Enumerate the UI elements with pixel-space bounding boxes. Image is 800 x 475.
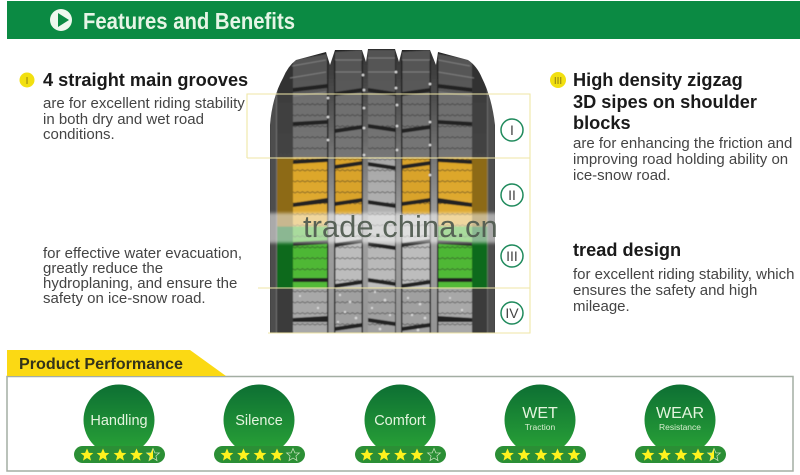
badge: silence bbox=[214, 384, 305, 463]
text block: water evacuation bbox=[43, 245, 242, 307]
badge: wet traction: WET bbox=[522, 405, 558, 422]
heading: zigzag sipes: blocks bbox=[573, 113, 631, 133]
text block: sipes benefit: ice-snow road. bbox=[573, 167, 671, 184]
heading: zigzag sipes bbox=[573, 70, 757, 133]
section tab: Product Performance bbox=[19, 356, 183, 373]
text block: grooves benefit: conditions. bbox=[43, 126, 115, 143]
text block: sipes benefit: are for enhancing the friction and bbox=[573, 135, 792, 152]
tire illustration bbox=[268, 48, 498, 340]
icon: yellow marker I: I bbox=[26, 76, 28, 87]
badge: wet traction: Traction bbox=[525, 422, 555, 432]
title: Features and Benefits bbox=[83, 8, 295, 34]
zone marker I bbox=[501, 119, 523, 141]
text block: water evacuation: greatly reduce the bbox=[43, 260, 163, 277]
badge: wear resistance: WEAR bbox=[656, 405, 704, 422]
icon: yellow marker III: III bbox=[554, 76, 562, 87]
heading: zigzag sipes: 3D sipes on shoulder bbox=[573, 92, 757, 112]
watermark: trade.china.cn bbox=[303, 209, 498, 244]
header banner bbox=[7, 1, 800, 39]
section tab bbox=[7, 350, 226, 376]
badge: wet traction bbox=[495, 384, 586, 463]
badge: wear resistance bbox=[635, 384, 726, 463]
text block: water evacuation: safety on ice-snow road. bbox=[43, 290, 206, 307]
text block: grooves benefit: are for excellent riding stability bbox=[43, 95, 245, 112]
text block: sipes benefit: improving road holding ability on bbox=[573, 151, 788, 168]
zone marker II bbox=[501, 184, 523, 206]
text block: tread benefit: ensures the safety and high bbox=[573, 282, 757, 299]
icon: play button bbox=[50, 9, 72, 31]
zone marker II: II bbox=[508, 187, 516, 203]
text block: tread benefit: mileage. bbox=[573, 298, 630, 315]
zone marker IV: IV bbox=[505, 305, 519, 321]
zone marker III bbox=[501, 245, 523, 267]
panel: product performance bbox=[7, 350, 793, 471]
text block: sipes benefit bbox=[573, 135, 792, 184]
badge: comfort: Comfort bbox=[374, 413, 426, 429]
text block: tread benefit bbox=[573, 266, 794, 315]
icon: yellow marker I bbox=[20, 72, 34, 88]
zone marker I: I bbox=[510, 122, 514, 138]
badge: silence: Silence bbox=[235, 413, 283, 429]
text block: grooves benefit bbox=[43, 95, 245, 143]
badge: comfort bbox=[355, 384, 446, 463]
heading: zigzag sipes: High density zigzag bbox=[573, 70, 743, 90]
zone marker III: III bbox=[506, 248, 518, 264]
zone marker IV bbox=[501, 302, 523, 324]
zone frame lines bbox=[247, 94, 530, 333]
text block: water evacuation: for effective water evacuation, bbox=[43, 245, 242, 262]
icon: yellow marker III bbox=[550, 72, 566, 88]
heading: 4 straight main grooves: 4 straight main grooves bbox=[43, 70, 248, 90]
badge: wear resistance: Resistance bbox=[659, 422, 701, 432]
text block: tread benefit: for excellent riding stability, which bbox=[573, 266, 794, 283]
badge: handling: Handling bbox=[90, 413, 148, 429]
text block: grooves benefit: in both dry and wet road bbox=[43, 111, 204, 128]
text block: water evacuation: hydroplaning, and ensure the bbox=[43, 275, 237, 292]
heading: tread design: tread design bbox=[573, 240, 681, 260]
badge: handling bbox=[74, 384, 165, 463]
